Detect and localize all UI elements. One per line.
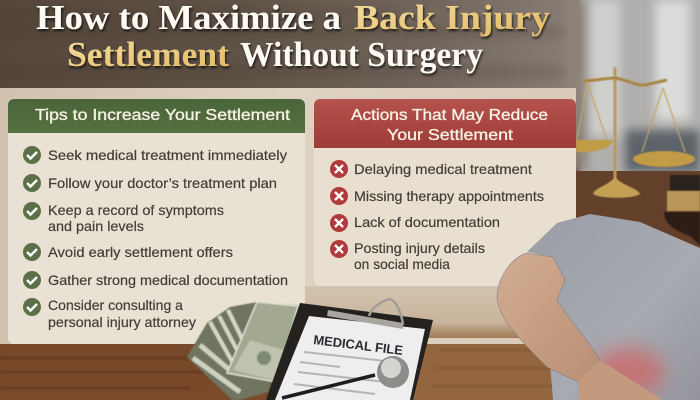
tip: follow plan: Follow your doctor’s treatment plan bbox=[48, 175, 277, 191]
action: delaying treatment: Delaying medical treatment bbox=[354, 161, 532, 177]
panel header: tips: Tips to Increase Your Settlement bbox=[35, 107, 291, 124]
hand bbox=[578, 360, 662, 400]
tip: keep record: and pain levels bbox=[48, 218, 144, 234]
tip: keep record: Keep a record of symptoms bbox=[48, 202, 224, 218]
illustration: medical file clipboard bbox=[266, 299, 433, 400]
panel header: actions: Actions That May Reduce bbox=[351, 107, 548, 124]
tip: gather documentation: Gather strong medical documentation bbox=[48, 272, 288, 288]
action: lack of documentation: Lack of documentation bbox=[354, 214, 500, 230]
illustration: medical file clipboard: MEDICAL FILE bbox=[313, 332, 404, 358]
title: Without Surgery bbox=[240, 35, 483, 74]
title: Settlement bbox=[67, 35, 229, 74]
action: posting on social media bbox=[330, 240, 485, 272]
panel header: actions bbox=[314, 99, 576, 148]
icon: gavel bbox=[664, 175, 700, 245]
tip: consult attorney bbox=[23, 297, 196, 330]
panel: actions that may reduce settlement bbox=[314, 99, 576, 286]
illustration: man holding lower back bbox=[497, 214, 700, 400]
action: missing appointments: Missing therapy appointments bbox=[354, 188, 544, 204]
arm bbox=[497, 253, 600, 382]
tip: consult attorney: personal injury attorney bbox=[48, 314, 196, 330]
panel header: tips bbox=[8, 99, 305, 133]
tip: seek treatment: Seek medical treatment immediately bbox=[48, 147, 287, 163]
parchment backdrop bbox=[0, 88, 576, 344]
action: posting on social media: Posting injury details bbox=[354, 240, 485, 256]
illustration: stack of cash bbox=[187, 302, 298, 400]
tip: keep record bbox=[23, 202, 224, 234]
panel: tips to increase settlement bbox=[8, 99, 305, 344]
title bbox=[36, 0, 551, 74]
tip: consult attorney: Consider consulting a bbox=[48, 297, 183, 313]
tip: avoid offers: Avoid early settlement offers bbox=[48, 244, 233, 260]
panel header: actions: Your Settlement bbox=[387, 127, 514, 144]
icon: scales of justice bbox=[576, 67, 695, 198]
shirt bbox=[527, 214, 700, 400]
action: posting on social media: on social media bbox=[354, 256, 450, 272]
icon: stethoscope bbox=[282, 356, 409, 398]
